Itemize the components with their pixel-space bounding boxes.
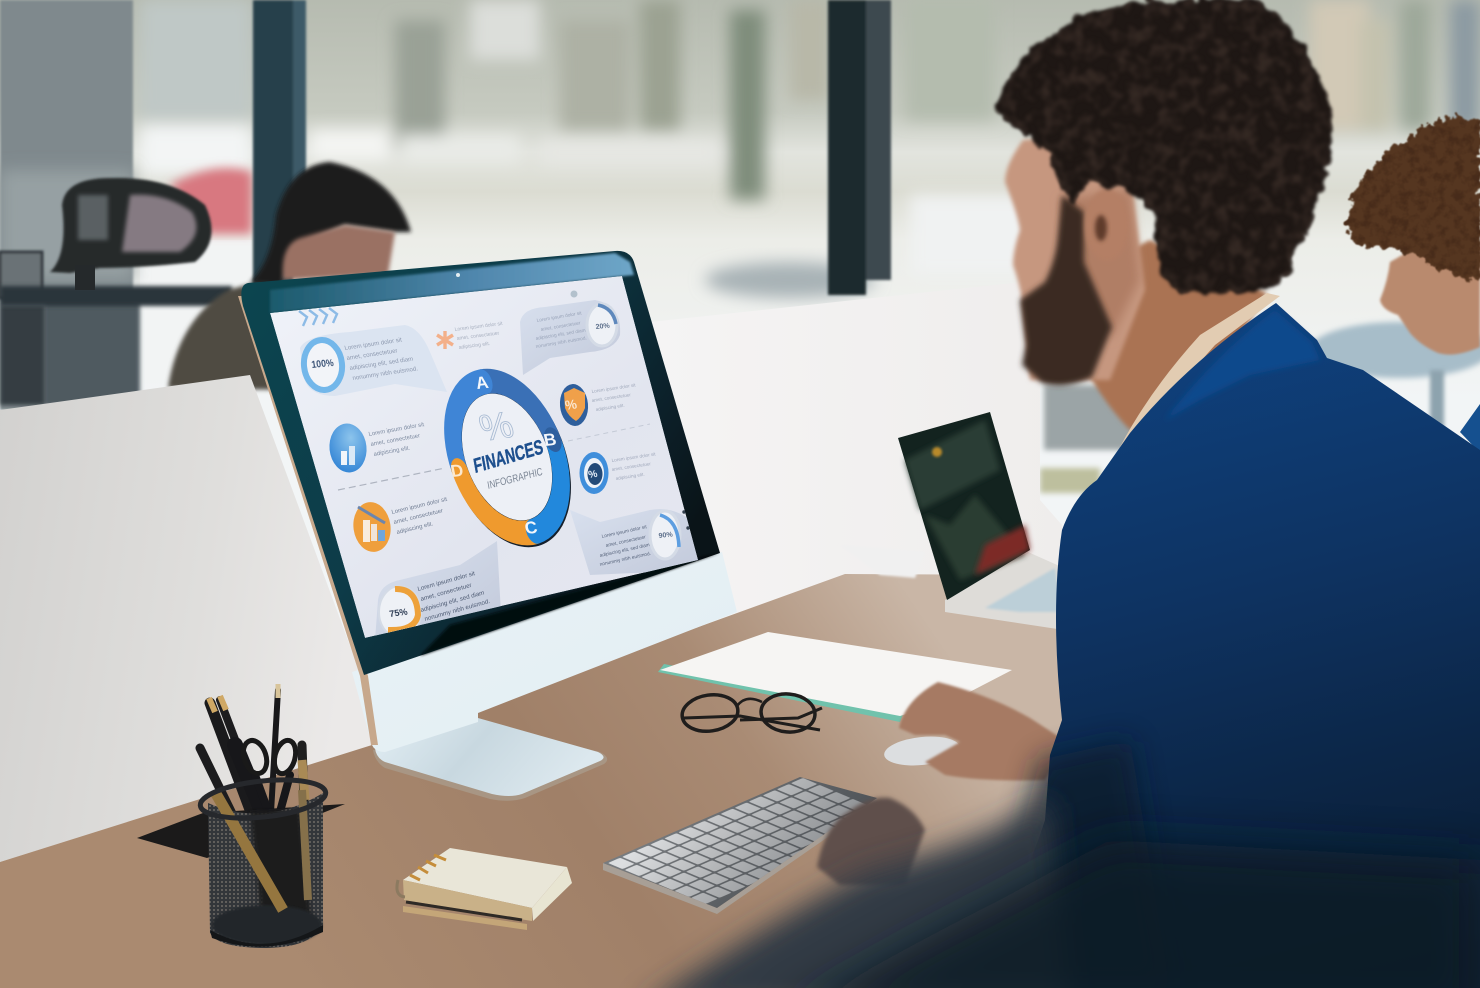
bubble: 75 percent: Lorem ipsum dolor sit [417, 570, 476, 593]
pens and pencils [200, 690, 304, 830]
mesh cup [208, 793, 323, 948]
text: shield note: amet, consectetuer [591, 392, 632, 403]
bubble: 100 percent: 100% [311, 358, 334, 371]
ring letters: A [474, 372, 490, 393]
screen: finances infographic [270, 276, 700, 640]
window frame: left mullion [253, 0, 306, 290]
icon: orange asterisk [437, 331, 453, 349]
dashed divider: right [568, 424, 650, 441]
monitor chin and neck [352, 552, 737, 752]
neck [1090, 240, 1267, 430]
partition: left white panel [0, 375, 374, 862]
foreground blur: dark bottom veil [780, 840, 1480, 988]
bubble: 20 percent: Lorem ipsum dolor sit [536, 310, 583, 324]
shirt cuff [997, 820, 1043, 900]
icon: tiny logo top right [570, 290, 578, 298]
background person: woman at desk [168, 162, 411, 390]
bubble: 75 percent: 75% [388, 607, 408, 619]
text: asterisk note [454, 321, 504, 351]
bubble: 100 percent [300, 325, 447, 396]
bubble: 90 percent [570, 509, 700, 575]
text: asterisk note: adipiscing elit. [458, 341, 491, 351]
bubble: 90 percent: amet, consectetuer [605, 534, 647, 549]
text: bar chart note: amet, consectetuer [370, 433, 421, 448]
laptop in the background [898, 412, 1064, 630]
navy blazer [960, 303, 1480, 988]
bubble: 20 percent: 20% [595, 323, 611, 331]
shirt collar [1120, 293, 1280, 452]
heading: FINANCES: FINANCES [472, 435, 545, 478]
monitor bezel [241, 251, 720, 675]
text: orange chart note [391, 497, 448, 536]
text: gear note: amet, consectetuer [611, 461, 652, 472]
text: shield note [591, 382, 637, 412]
bubble: 20 percent: nonummy nibh euismod. [535, 335, 587, 350]
pencil holder [198, 684, 328, 948]
man's right hand on mouse [899, 682, 1067, 780]
bubble: 90 percent: 90% [658, 531, 674, 540]
percent symbol outline: % [474, 404, 518, 449]
main person: man in navy blazer [960, 0, 1480, 988]
reflection on lower bezel [420, 553, 720, 656]
keyboard [603, 777, 903, 914]
bubble: 20 percent: amet, consectetuer [540, 320, 582, 333]
desktop monitor stand base [373, 718, 607, 801]
desk [0, 574, 1070, 988]
icon: shield percent [560, 384, 588, 426]
notebook and white paper [658, 632, 1012, 722]
bubble: 20 percent: adipiscing elit, sed diam [535, 328, 586, 342]
man's left hand on keyboard [817, 798, 925, 885]
bubble: 100 percent: Lorem ipsum dolor sit [344, 336, 403, 352]
bubble: 20 percent [520, 300, 620, 375]
eyeglasses [680, 691, 822, 735]
hair [995, 0, 1334, 295]
icon: blue bar chart [330, 424, 367, 472]
text: bar chart note: Lorem ipsum dolor sit [368, 422, 425, 438]
bubble: 90 percent: Lorem ipsum dolor sit [601, 524, 648, 540]
bubble: 75 percent: adipiscing elit, sed diam [420, 589, 485, 614]
icon: gear percent [580, 452, 608, 494]
pillar: concrete column [0, 0, 133, 410]
webcam dot [456, 273, 460, 277]
ring letters: B [542, 429, 558, 450]
second colleague on the right [1347, 117, 1480, 453]
cheek shading [1060, 190, 1140, 340]
dashed divider: left [338, 468, 445, 490]
text: shield note: Lorem ipsum dolor sit [591, 382, 637, 394]
office chair [0, 178, 232, 405]
text: bar chart note: adipiscing elit. [373, 445, 411, 458]
bubble: 90 percent: adipiscing elit, sed diam [599, 542, 650, 559]
bubble: 90 percent: nonummy nibh euismod. [599, 551, 652, 568]
ring letters: D [449, 460, 465, 481]
small spiral notepad [397, 848, 572, 930]
ear [1085, 189, 1129, 261]
bubble: 100 percent: amet, consectetuer [346, 347, 398, 362]
desktop monitor [238, 251, 737, 752]
computer mouse [883, 733, 961, 769]
text: orange chart note: Lorem ipsum dolor sit [391, 497, 448, 516]
subheading: INFOGRAPHIC: INFOGRAPHIC [486, 466, 544, 492]
text: bar chart note [368, 422, 425, 458]
documents on desk in the background [840, 545, 925, 578]
foreground blur: dark forearm veil [640, 800, 1070, 988]
monitor edge highlight [238, 296, 378, 745]
ring letters: C [523, 517, 539, 538]
blazer collar highlight [1165, 310, 1320, 420]
beard [1020, 195, 1112, 385]
text: gear note [611, 451, 657, 481]
top bezel reflection [270, 253, 634, 313]
bubble: 75 percent: nonummy nibh euismod. [424, 598, 491, 623]
text: gear note: adipiscing elit. [615, 472, 645, 481]
window frame: right mullion [828, 0, 891, 295]
sleeve shadow [980, 740, 1170, 988]
text: orange chart note: adipiscing elit. [396, 521, 434, 536]
text: asterisk note: amet, consectetuer [456, 330, 500, 342]
bubble: 75 percent: amet, consectetuer [420, 582, 472, 603]
text: asterisk note: Lorem ipsum dolor sit [454, 321, 504, 333]
bubble: 100 percent: nonummy nibh euismod. [352, 365, 419, 382]
text: shield note: adipiscing elit. [595, 403, 625, 412]
face [1005, 130, 1145, 380]
bubble: 75 percent [375, 541, 502, 640]
pen cable tray [137, 804, 345, 858]
ring letters [449, 372, 558, 538]
text: gear note: Lorem ipsum dolor sit [611, 451, 657, 463]
chevrons [299, 308, 337, 326]
donut chart: A B C D ring [444, 368, 571, 548]
partition: right white panel [650, 280, 1062, 615]
icon: orange bar chart [353, 502, 391, 552]
icon: gear percent: % [587, 469, 598, 481]
bubble: 100 percent: adipiscing elit, sed diam [349, 356, 414, 372]
icon: shield percent: % [564, 396, 578, 413]
text: orange chart note: amet, consectetuer [393, 508, 444, 526]
